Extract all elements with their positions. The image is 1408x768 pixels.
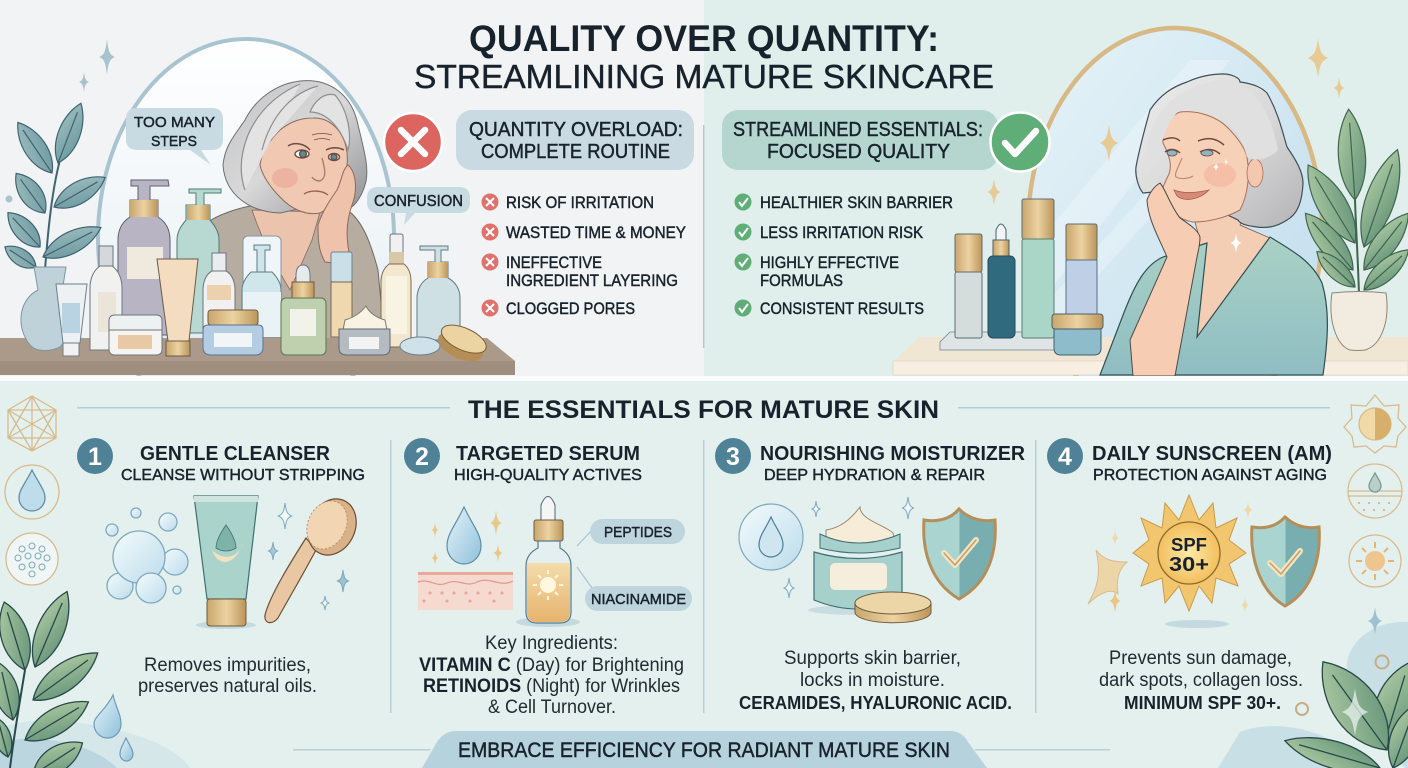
mirror shine <box>1040 60 1255 335</box>
step 4 description: Prevents sun damage, <box>1109 648 1292 669</box>
step 1 description: Removes impurities, <box>144 655 311 676</box>
connector lines <box>577 530 592 588</box>
heading: quantity overload: QUANTITY OVERLOAD: <box>469 118 683 141</box>
step 2 description: RETINOIDS (Night) for Wrinkles <box>423 676 680 697</box>
heading: quantity overload <box>456 110 694 170</box>
step 1 number <box>77 438 113 474</box>
brush <box>265 491 365 623</box>
gold star shapes <box>1088 501 1252 613</box>
dark serum <box>988 224 1015 338</box>
step 4 description: dark spots, collagen loss. <box>1099 670 1303 691</box>
step 2 description: Key Ingredients: <box>485 633 618 654</box>
plant right <box>1296 108 1408 297</box>
jar <box>808 507 912 615</box>
mirror right <box>1028 28 1322 428</box>
step 2 heading: HIGH-QUALITY ACTIVES <box>454 467 642 484</box>
shield <box>924 509 995 599</box>
decorative blobs bottom corners <box>0 622 1408 768</box>
step 3 heading: NOURISHING MOISTURIZER <box>760 443 1026 465</box>
item: ineffective layering <box>482 254 678 290</box>
left woman blush <box>272 168 298 188</box>
title: STREAMLINING MATURE SKINCARE <box>414 58 994 95</box>
drop <box>447 507 481 564</box>
step 1 description <box>138 655 317 697</box>
bubble: too many steps: STEPS <box>151 133 197 150</box>
left woman hair <box>223 81 367 213</box>
step 4 description: MINIMUM SPF 30+. <box>1124 693 1281 713</box>
bubbles <box>106 508 188 603</box>
step 3 description: locks in moisture. <box>800 670 945 691</box>
background: top left panel <box>0 0 704 376</box>
plant bottom left <box>0 586 106 768</box>
green serum <box>281 265 326 355</box>
plant left <box>4 102 106 269</box>
step 3 heading <box>760 443 1026 484</box>
step 2 heading: TARGETED SERUM <box>456 443 640 465</box>
bubble: too many steps: TOO MANY <box>134 114 215 131</box>
right woman chest and neck <box>1190 215 1270 340</box>
step 4 heading: DAILY SUNSCREEN (AM) <box>1092 443 1332 465</box>
step 3 description <box>739 648 1012 713</box>
left woman neck and chest <box>252 210 320 290</box>
right woman hair <box>1136 74 1303 227</box>
left shoulders and top <box>205 206 385 345</box>
left woman features <box>288 134 344 195</box>
step 3 illustration <box>739 497 995 623</box>
bubble: confusion: CONFUSION <box>374 193 463 210</box>
list: downsides <box>482 194 686 318</box>
step 1 number: 1 <box>88 443 102 471</box>
list: benefits <box>734 194 953 318</box>
step 3 number: 3 <box>726 443 740 471</box>
sparkles <box>784 497 914 598</box>
small tube <box>56 284 87 356</box>
product group left <box>21 180 490 367</box>
background: separator band <box>0 376 1408 382</box>
product group right <box>940 199 1103 355</box>
sun <box>1133 495 1246 611</box>
sparkles gold <box>432 510 502 565</box>
item: clogged pores: CLOGGED PORES <box>506 300 635 318</box>
mirror left <box>96 37 396 376</box>
background: essentials panel <box>0 381 1408 768</box>
vase <box>21 267 69 351</box>
item: highly effective formulas: HIGHLY EFFECTIVE <box>760 254 899 272</box>
gold lid <box>855 592 931 623</box>
shelf right <box>893 337 1408 375</box>
glass stand <box>940 332 1060 350</box>
item: less irritation risk: LESS IRRITATION RISK <box>760 224 923 242</box>
sparkles <box>269 503 348 610</box>
left woman hand <box>318 165 355 265</box>
dropper bottle <box>516 496 580 627</box>
panel: quantity overload scene <box>0 37 694 376</box>
step 4 illustration <box>1088 495 1319 628</box>
step 3 description: CERAMIDES, HYALURONIC ACID. <box>739 693 1012 713</box>
icon: red x <box>384 113 442 171</box>
gold lid <box>438 324 487 362</box>
tube <box>194 496 258 629</box>
item: risk of irritation: RISK OF IRRITATION <box>506 194 654 212</box>
step 3 heading: DEEP HYDRATION & REPAIR <box>764 467 985 484</box>
icon: geometric hexagon <box>8 396 56 451</box>
item: consistent results: CONSISTENT RESULTS <box>760 300 924 318</box>
step 2 number <box>404 438 440 474</box>
left jar white <box>109 315 162 355</box>
drops bottom left <box>94 695 133 761</box>
right woman features <box>1163 138 1224 199</box>
right woman face <box>1163 112 1248 222</box>
item: highly effective formulas: FORMULAS <box>760 272 843 290</box>
heading: essentials: THE ESSENTIALS FOR MATURE SKIN <box>468 396 939 424</box>
water disc <box>739 504 803 570</box>
heading: streamlined essentials: FOCUSED QUALITY <box>767 140 950 163</box>
mint bottle <box>177 189 221 333</box>
title: QUALITY OVER QUANTITY: <box>469 18 939 59</box>
big grey bottle <box>118 180 170 335</box>
plant pot <box>1331 292 1387 350</box>
white pump bottle <box>90 246 122 350</box>
bubble: confusion <box>367 187 470 225</box>
step 4 description <box>1099 648 1303 713</box>
item: wasted time and money: WASTED TIME & MONEY <box>506 224 686 242</box>
right woman hair front <box>1146 80 1278 175</box>
shadow <box>1165 620 1229 628</box>
item: ineffective layering: INGREDIENT LAYERING <box>506 272 678 290</box>
item: ineffective layering: INEFFECTIVE <box>506 254 602 272</box>
step 2 description: VITAMIN C (Day) for Brightening <box>419 655 684 676</box>
step 4 heading: PROTECTION AGAINST AGING <box>1093 467 1327 484</box>
plant bottom right <box>1281 649 1408 768</box>
step 1 illustration <box>106 491 365 629</box>
pill: niacinamide <box>585 586 692 611</box>
pill: peptides: PEPTIDES <box>604 525 672 541</box>
right woman hand and arm <box>1130 183 1200 376</box>
panel: streamlined essentials scene <box>722 28 1408 428</box>
beige tall tube <box>331 252 352 337</box>
icon: cell pattern circle <box>6 533 58 585</box>
divider lines <box>390 440 1036 713</box>
right woman ear <box>1247 159 1263 187</box>
step 1 heading: GENTLE CLEANSER <box>140 443 331 465</box>
step 2 description: & Cell Turnover. <box>488 697 616 718</box>
step 1 heading <box>121 443 365 484</box>
table left <box>0 338 515 375</box>
icon: sun circle <box>1349 535 1401 587</box>
shield <box>1252 517 1319 606</box>
pill: niacinamide: NIACINAMIDE <box>591 592 686 608</box>
heading: streamlined essentials: STREAMLINED ESSENTIALS: <box>733 118 983 141</box>
jar <box>1052 314 1103 355</box>
step 2 number: 2 <box>415 443 429 471</box>
step 1 heading: CLEANSE WITHOUT STRIPPING <box>121 467 365 484</box>
clear pump bottle <box>242 236 281 337</box>
background: top right panel <box>704 0 1408 376</box>
step 4 number <box>1047 438 1083 474</box>
periwinkle bottle <box>1066 224 1097 322</box>
step 4 heading <box>1092 443 1332 484</box>
sun: 30+ <box>1169 554 1209 576</box>
sparkle and rings bottom right <box>1296 607 1388 736</box>
pill: peptides <box>590 519 685 544</box>
left side icons <box>5 396 59 585</box>
tube bottle <box>955 234 982 338</box>
sun: SPF <box>1171 535 1207 555</box>
footer banner <box>293 731 1110 768</box>
white small bottle <box>203 253 235 333</box>
step 4 number: 4 <box>1058 443 1072 471</box>
title <box>414 18 994 95</box>
robe <box>1100 237 1327 375</box>
small lid <box>400 337 440 355</box>
step 3 number <box>715 438 751 474</box>
left woman hair sweeps <box>241 84 349 190</box>
icon: skin layer <box>1348 464 1402 518</box>
blue pump bottle <box>417 246 460 340</box>
step 2 heading <box>454 443 642 484</box>
step 2 description <box>419 633 684 718</box>
cream tube <box>157 259 198 356</box>
cream jar <box>339 306 390 355</box>
tall teal bottle <box>1022 199 1054 338</box>
sparkles left <box>79 39 115 92</box>
item: healthier skin barrier: HEALTHIER SKIN BARRIER <box>760 194 953 212</box>
step 3 description: Supports skin barrier, <box>784 648 961 669</box>
blue jar gold lid <box>203 310 263 355</box>
icon: water drop circle <box>5 465 59 519</box>
heading: streamlined essentials <box>722 110 998 170</box>
right side icons <box>1344 395 1406 587</box>
step 2 illustration <box>418 496 692 627</box>
heading: quantity overload: COMPLETE ROUTINE <box>481 140 670 163</box>
skin layers <box>418 572 513 610</box>
blush and glow <box>1204 158 1242 253</box>
sparkles right <box>987 38 1344 206</box>
beige bottle <box>381 234 411 347</box>
step 1 description: preserves natural oils. <box>138 676 317 697</box>
icon: green check <box>990 112 1050 172</box>
left woman face <box>260 118 347 214</box>
bubble: too many steps <box>126 108 223 165</box>
item: highly effective formulas <box>734 254 899 290</box>
icon: sun star <box>1344 395 1406 453</box>
footer banner: EMBRACE EFFICIENCY FOR RADIANT MATURE SKIN <box>458 739 950 762</box>
